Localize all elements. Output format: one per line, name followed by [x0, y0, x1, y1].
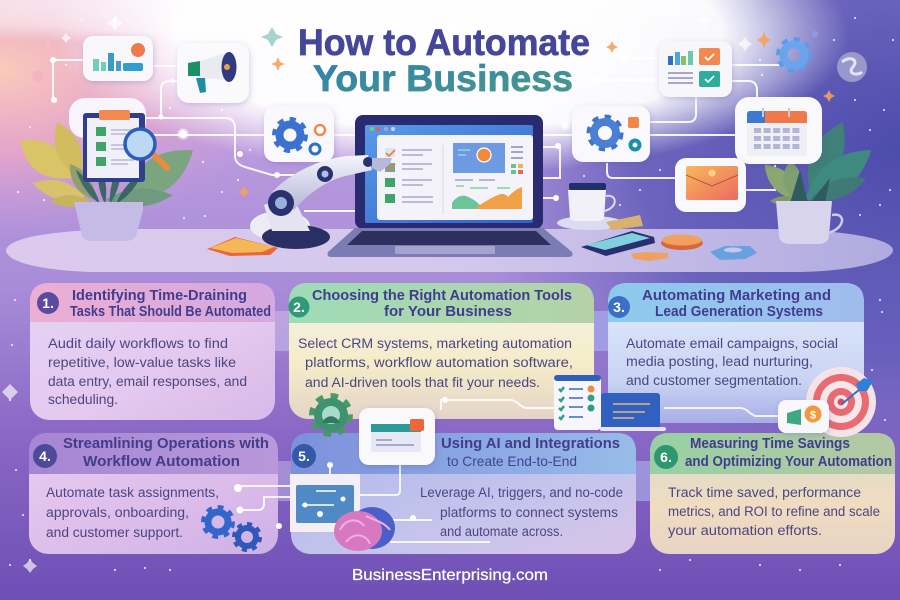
laptop base	[328, 228, 572, 257]
body 6: metrics, and ROI to refine and scale	[668, 504, 880, 520]
heading 2: Choosing the Right Automation Tools	[312, 288, 572, 304]
body 2	[298, 336, 573, 391]
body 6: Track time saved, performance	[668, 485, 861, 501]
body 3	[626, 336, 838, 389]
panel: card 4	[29, 433, 278, 554]
icon: right gear card	[572, 106, 650, 162]
title: How to Automate	[298, 22, 590, 63]
heading 6	[685, 436, 892, 470]
heading 1: Tasks That Should Be Automated	[70, 304, 271, 320]
title	[298, 22, 590, 99]
body 5: and automate across.	[440, 524, 563, 540]
badge 2: 2.	[293, 299, 305, 315]
icon: left plant	[11, 118, 203, 241]
heading 3: Lead Generation Systems	[655, 304, 823, 320]
panel: card 2	[275, 283, 594, 419]
icon: gear card left	[264, 106, 334, 162]
badge 1: 1.	[42, 295, 54, 311]
heading 2	[312, 288, 572, 320]
heading 6: Measuring Time Savings	[690, 436, 850, 452]
icon: brain	[334, 507, 395, 551]
body 1: scheduling.	[48, 392, 118, 408]
icon: popup window card	[359, 408, 435, 465]
screen: area chart	[452, 187, 522, 209]
connector nodes	[234, 397, 448, 529]
body 5	[420, 485, 623, 540]
robot arm	[250, 155, 392, 249]
body 6	[668, 485, 880, 539]
badge 6	[654, 445, 678, 469]
heading 2: for Your Business	[384, 304, 512, 320]
body 2: platforms, workflow automation software,	[305, 355, 573, 371]
title: Your Business	[313, 58, 573, 99]
badge 6: 6.	[660, 449, 672, 465]
body 6: your automation efforts.	[668, 523, 822, 539]
icon: floating gear	[779, 40, 809, 70]
body 3: Automate email campaigns, social	[626, 336, 838, 352]
icon: target with arrow	[806, 367, 876, 437]
laptop	[328, 115, 572, 257]
icon: calendar card	[735, 97, 822, 164]
icon: green gear	[312, 396, 350, 434]
icon: coins card	[778, 400, 829, 433]
body 4: Automate task assignments,	[46, 485, 219, 501]
heading 4: Workflow Automation	[83, 454, 240, 470]
body 1: Audit daily workflows to find	[48, 336, 228, 352]
panel: card 1	[30, 283, 275, 420]
body 3: media posting, lead nurturing,	[626, 354, 813, 370]
screen: dashboard panel	[453, 143, 523, 188]
connector lines	[53, 58, 780, 211]
icon: sphere	[837, 52, 867, 82]
icon: checklist card	[554, 375, 601, 430]
body 4: approvals, onboarding,	[46, 505, 189, 521]
heading 4: Streamlining Operations with	[63, 436, 269, 452]
icon: mini laptop	[600, 393, 666, 431]
icon: coins card: $	[810, 410, 816, 422]
icon: envelope card	[675, 158, 746, 212]
body 4	[46, 485, 219, 541]
heading 5: to Create End-to-End	[447, 453, 577, 469]
body 1: repetitive, low-value tasks like	[48, 355, 236, 371]
icon: megaphone card	[177, 43, 249, 103]
icon: chart card	[83, 36, 153, 81]
heading 5	[441, 436, 620, 469]
heading 1	[70, 288, 271, 320]
icon: right pot cup	[776, 201, 832, 244]
body 1	[48, 336, 247, 408]
panel: card 6	[636, 433, 895, 554]
icon: coins and small gears	[631, 234, 757, 261]
desk surface	[6, 229, 893, 272]
body 2: and AI-driven tools that fit your needs.	[305, 375, 540, 391]
icon: left pot	[74, 202, 143, 241]
icon: clipboard with magnifier	[69, 98, 167, 182]
body 4: and customer support.	[46, 525, 183, 541]
body 5: Leverage AI, triggers, and no-code	[420, 485, 623, 501]
badge 4	[33, 444, 57, 468]
body 1: data entry, email responses, and	[48, 374, 247, 390]
footer website: BusinessEnterprising.com	[352, 567, 548, 584]
icon: coffee cup	[557, 183, 643, 230]
icon: workflow circuit card	[290, 474, 360, 532]
icon: dashboard card	[659, 41, 732, 97]
badge 3: 3.	[613, 299, 625, 315]
icon: right plant	[758, 116, 880, 244]
heading 3: Automating Marketing and	[642, 288, 831, 304]
screen: checklist	[385, 145, 443, 214]
body 2: Select CRM systems, marketing automation	[298, 336, 572, 352]
icon: sticky notes	[207, 237, 278, 256]
panel: card 5	[278, 433, 636, 554]
circuit lines over lower cards	[238, 400, 780, 542]
badge 3	[608, 296, 630, 318]
badge 5: 5.	[298, 448, 310, 464]
heading 3	[642, 288, 831, 320]
badge 2	[288, 296, 310, 318]
body 3: and customer segmentation.	[626, 373, 802, 389]
badge 4: 4.	[39, 448, 51, 464]
heading 4	[63, 436, 269, 470]
body 5: platforms to connect systems	[440, 505, 618, 521]
heading 1: Identifying Time-Draining	[72, 288, 247, 304]
icon: phone	[581, 231, 655, 256]
icon: twin gears	[204, 508, 260, 550]
badge 1	[37, 292, 59, 314]
panel: card 3	[594, 283, 864, 423]
heading 5: Using AI and Integrations	[441, 436, 620, 452]
badge 5	[292, 444, 316, 468]
